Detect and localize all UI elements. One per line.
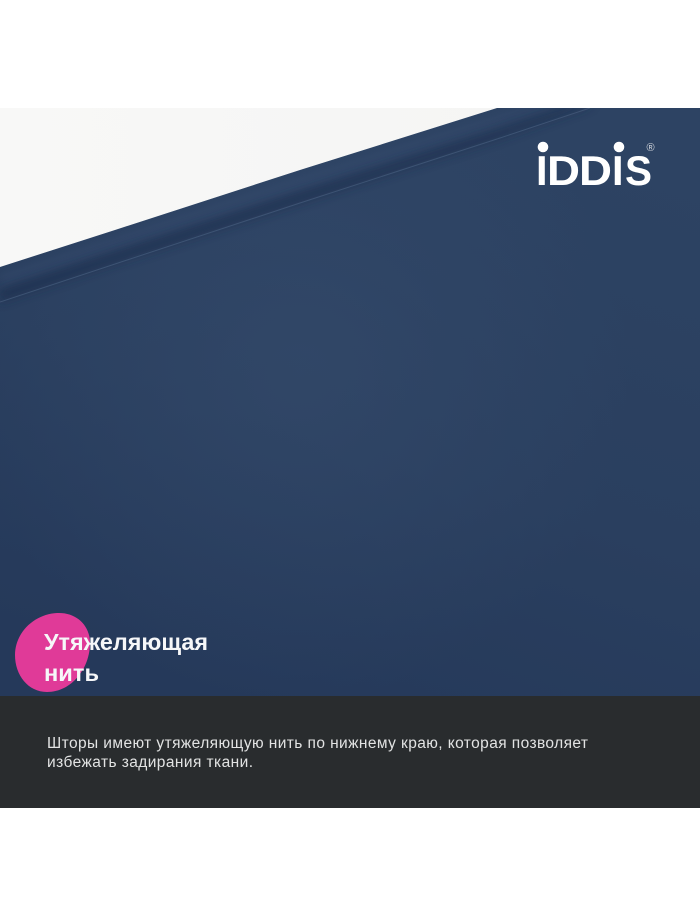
photo: navy curtain fabric with weighted hem [0,104,700,696]
logo: IDDIS: I [536,147,548,194]
logo: IDDIS: I [612,147,624,194]
logo: IDDIS: D [547,147,580,194]
logo: IDDIS: D [579,147,612,194]
logo: IDDIS [536,142,655,194]
heading: нить [44,660,99,686]
description text: Шторы имеют утяжеляющую нить по нижнему краю, которая позволяет [47,735,588,752]
logo: IDDIS: S [625,147,652,194]
description text: избежать задирания ткани. [47,754,253,771]
accent: pink blob [15,613,90,692]
description bar [0,696,700,808]
logo registered mark: ® [646,142,655,154]
heading: Утяжеляющая [44,629,208,655]
